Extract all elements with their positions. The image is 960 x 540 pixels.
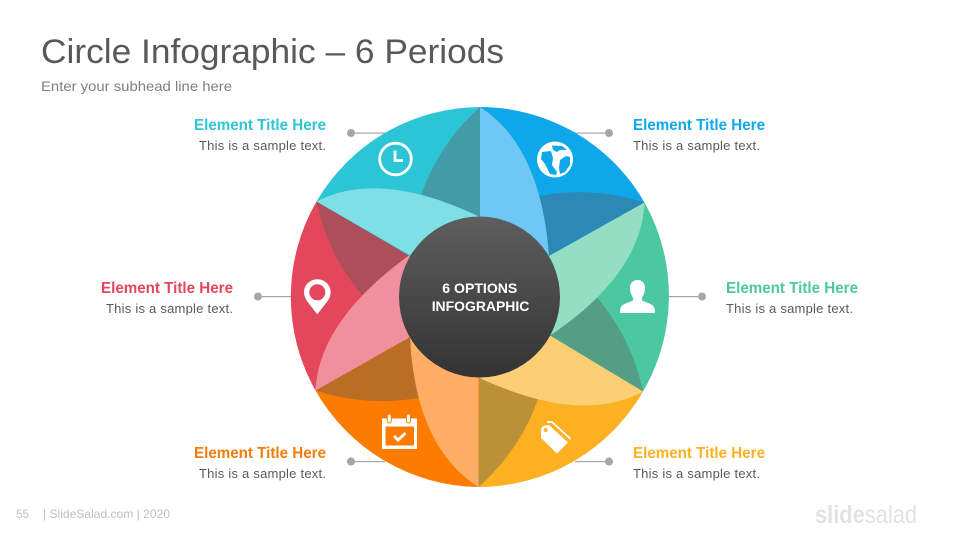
connector lines [254, 129, 706, 466]
label: bottom left [194, 445, 326, 481]
label: top left: Element Title Here [194, 117, 326, 134]
label: middle left [101, 280, 233, 316]
icon: location pin [304, 279, 331, 314]
label: top right: This is a sample text. [633, 138, 760, 153]
title: Circle Infographic – 6 Periods [41, 33, 504, 71]
label: middle right: Element Title Here [726, 280, 858, 297]
footer: logo: slidesalad [815, 501, 917, 529]
label: bottom right: This is a sample text. [633, 466, 760, 481]
label: bottom right: Element Title Here [633, 445, 765, 462]
label: bottom left: Element Title Here [194, 445, 326, 462]
icon: person [620, 280, 655, 313]
center circle: 6 OPTIONS [442, 280, 517, 296]
center circle [399, 216, 560, 378]
center circle: INFOGRAPHIC [432, 298, 529, 314]
panel: orange sector [316, 297, 480, 487]
label: bottom right [633, 445, 765, 481]
label: middle right: This is a sample text. [726, 301, 853, 316]
icon: price tag [541, 422, 570, 454]
label: top right [633, 117, 765, 153]
label: middle right [726, 280, 858, 316]
panel: teal sector [316, 107, 480, 297]
label: top right: Element Title Here [633, 117, 765, 134]
subhead: Enter your subhead line here [41, 78, 232, 94]
footer: page number and source: 55 [16, 507, 29, 521]
label: top left [194, 117, 326, 153]
panel: blue sector [480, 107, 644, 297]
icon: globe [537, 142, 573, 178]
panel: yellow sector [478, 297, 643, 487]
footer: page number and source: | SlideSalad.com | 2020 [43, 507, 170, 521]
label: bottom left: This is a sample text. [199, 466, 326, 481]
panel: green sector [480, 202, 669, 392]
label: top left: This is a sample text. [199, 138, 326, 153]
label: middle left: Element Title Here [101, 280, 233, 297]
label: middle left: This is a sample text. [106, 301, 233, 316]
icon: clock [380, 143, 411, 175]
icon: calendar [382, 414, 417, 449]
panel: red sector [291, 202, 480, 390]
